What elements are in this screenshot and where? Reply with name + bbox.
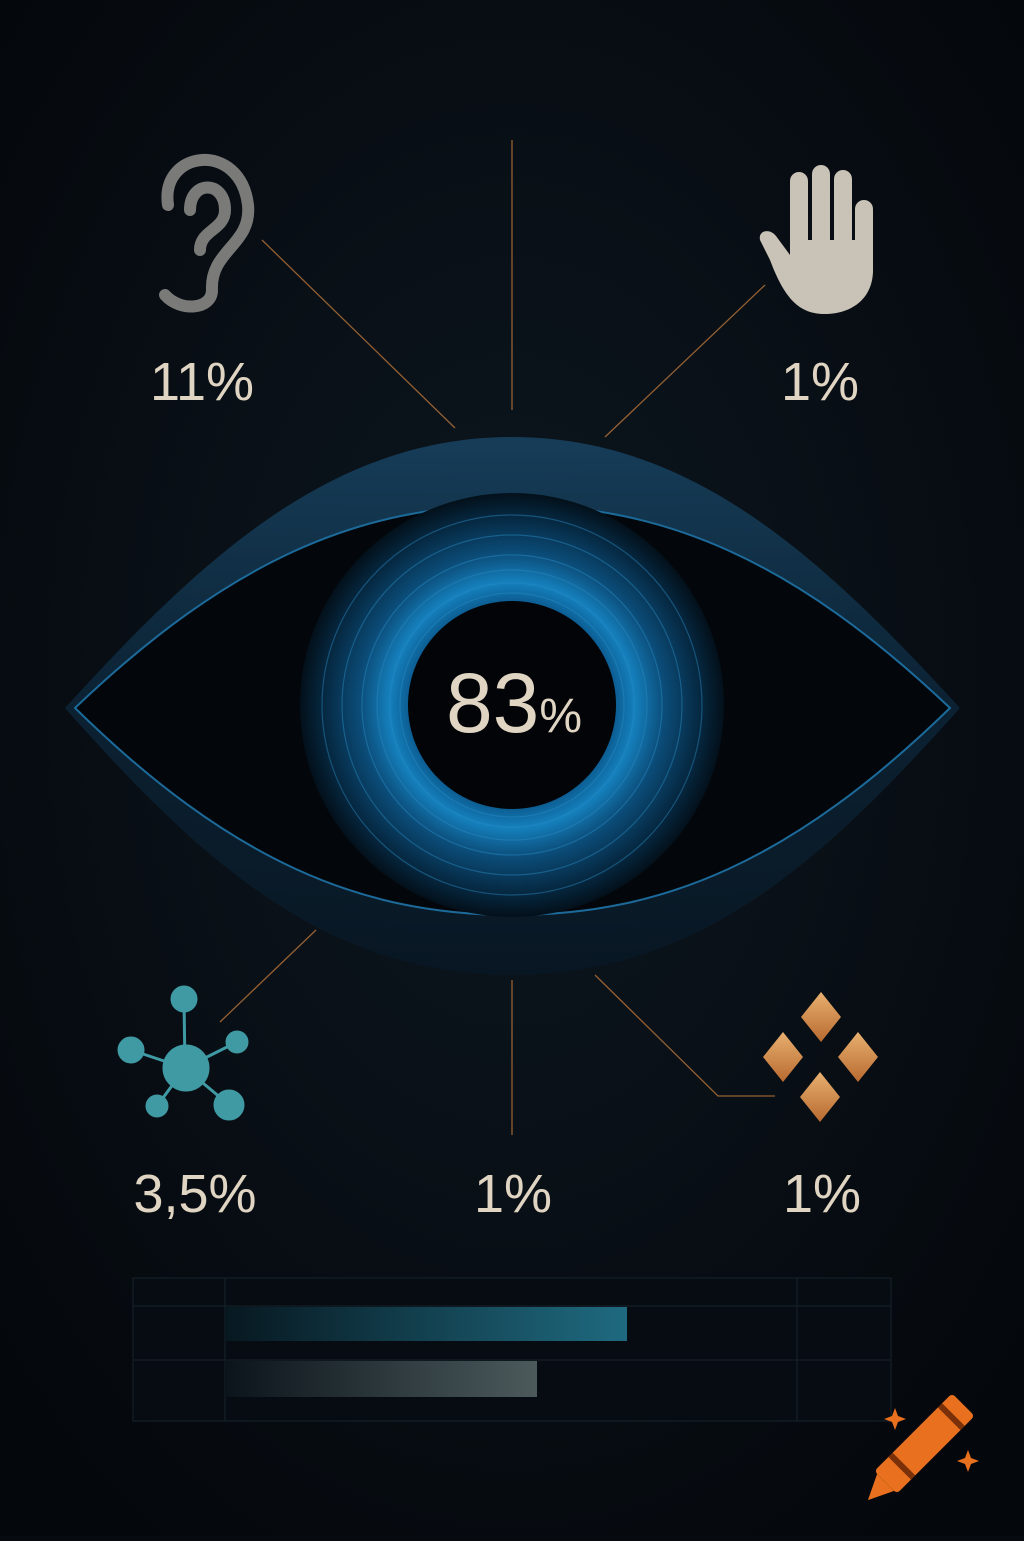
icon: crayon logo xyxy=(857,1393,979,1511)
label: 11%: 11% xyxy=(150,352,254,412)
eye xyxy=(65,437,960,975)
icon: diamonds xyxy=(763,992,878,1122)
label: 1% bottom center: 1% xyxy=(474,1164,552,1224)
icon: network xyxy=(119,987,247,1119)
icon: hand xyxy=(760,165,873,314)
icon: ear xyxy=(165,160,248,306)
connector lines xyxy=(220,140,775,1135)
label: 3,5%: 3,5% xyxy=(133,1164,257,1224)
label: 1% top right: 1% xyxy=(781,352,859,412)
label: 1% bottom right: 1% xyxy=(783,1164,861,1224)
bar chart xyxy=(133,1278,891,1421)
iris xyxy=(300,493,724,917)
center value: 83% xyxy=(446,656,582,750)
